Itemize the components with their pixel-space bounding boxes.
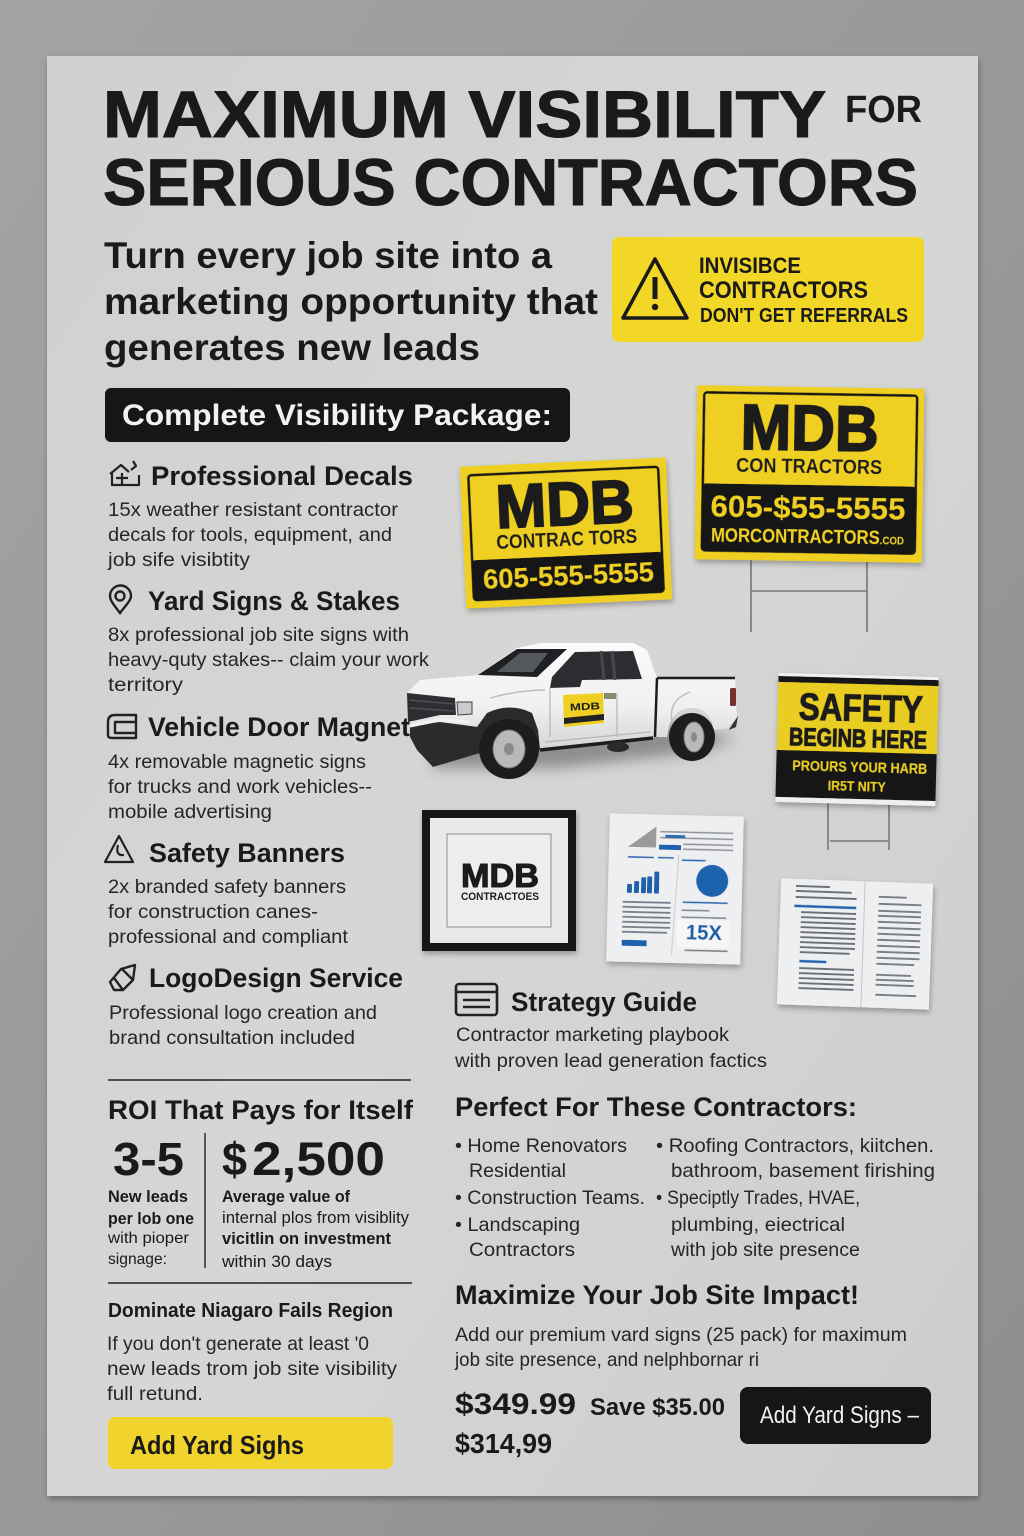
framed logo xyxy=(422,810,576,951)
subtitle: Turn every job site into a xyxy=(104,235,552,276)
guarantee: If you don't generate at least '0 xyxy=(107,1333,369,1355)
stat: leads: 3-5 xyxy=(113,1133,184,1185)
subtitle xyxy=(104,235,598,368)
safety sign: BEGINB HERE xyxy=(789,723,927,755)
framed logo: MDB xyxy=(461,857,539,894)
stat: leads: New leads xyxy=(108,1188,188,1206)
sign: MDB contractors large xyxy=(695,385,924,632)
maximize impact offer: job site presence, and nelphbornar ri xyxy=(454,1349,759,1371)
icon: logo tag xyxy=(110,965,135,990)
item: yard signs and stakes: heavy-quty stakes-- claim your work xyxy=(108,649,429,671)
subtitle: marketing opportunity that xyxy=(104,281,598,322)
list right: • Roofing Contractors, kiitchen. xyxy=(656,1135,934,1157)
item: professional decals: job sife visibtity xyxy=(107,549,250,571)
guarantee: full retund. xyxy=(107,1383,203,1405)
strategy guide xyxy=(454,984,767,1072)
maximize impact offer xyxy=(454,1280,907,1371)
item: vehicle door magnets: Vehicle Door Magnet xyxy=(148,712,410,742)
sign: MDB contractors small xyxy=(460,457,672,609)
strategy guide: Strategy Guide xyxy=(511,987,697,1017)
icon: magnet sign xyxy=(108,715,136,738)
item: logo design service: brand consultation included xyxy=(109,1027,355,1049)
stat: leads: with pioper xyxy=(107,1230,190,1247)
list right: plumbing, eiectrical xyxy=(671,1214,845,1236)
warning callout: DON'T GET REFERRALS xyxy=(700,305,908,327)
stat: value: $ xyxy=(222,1133,247,1185)
stat: leads: signage: xyxy=(108,1251,167,1268)
sign: MDB contractors large: MORCONTRACTORS.COD xyxy=(711,525,904,549)
item: yard signs and stakes: Yard Signs & Stakes xyxy=(148,586,400,616)
item: yard signs and stakes xyxy=(108,586,429,696)
package heading bar xyxy=(105,388,570,442)
title: SERIOUS CONTRACTORS xyxy=(103,145,918,219)
safety sign xyxy=(775,673,939,850)
item: vehicle door magnets: 4x removable magnetic signs xyxy=(108,751,366,773)
item: safety banners: professional and compliant xyxy=(108,926,349,948)
title: FOR xyxy=(845,89,922,131)
icon: decals xyxy=(110,461,139,485)
list left: • Home Renovators xyxy=(455,1135,627,1157)
list left xyxy=(455,1135,645,1261)
safety sign: IR5T NITY xyxy=(828,777,887,795)
ROI section: ROI That Pays for Itself xyxy=(108,1095,414,1125)
warning callout: CONTRACTORS xyxy=(699,277,868,304)
item: safety banners: Safety Banners xyxy=(149,838,345,868)
guarantee: new leads trom job site visibility xyxy=(107,1358,397,1380)
perfect for these contractors xyxy=(455,1092,935,1261)
maximize impact offer: Maximize Your Job Site Impact! xyxy=(455,1280,859,1310)
yellow button: Add Yard Sighs xyxy=(130,1430,304,1460)
item: professional decals: Professional Decals xyxy=(151,461,413,491)
framed logo: CONTRACTOES xyxy=(461,891,539,903)
sign: MDB contractors large: MDB xyxy=(740,391,879,465)
list right: with job site presence xyxy=(670,1239,860,1261)
stat: leads: per lob one xyxy=(108,1210,194,1228)
item: professional decals: 15x weather resistant contractor xyxy=(108,499,399,521)
maximize impact offer: Add our premium vard signs (25 pack) for maximum xyxy=(455,1324,907,1346)
sign: MDB contractors large: CON TRACTORS xyxy=(736,455,882,479)
pricing: Save $35.00 xyxy=(590,1394,725,1421)
item: safety banners xyxy=(105,836,349,948)
item: vehicle door magnets xyxy=(108,712,410,823)
warning callout xyxy=(612,237,924,342)
stat: leads xyxy=(107,1133,194,1268)
stat: value: within 30 days xyxy=(221,1252,332,1271)
subtitle: generates new leads xyxy=(104,327,480,368)
black button: Add Yard Signs – xyxy=(760,1402,920,1429)
item: yard signs and stakes: 8x professional job site signs with xyxy=(108,624,409,646)
item: logo design service: Professional logo creation and xyxy=(109,1002,377,1024)
item: professional decals xyxy=(107,461,413,571)
warning callout: INVISIBCE xyxy=(699,253,801,278)
item: logo design service: LogoDesign Service xyxy=(149,963,403,993)
item: safety banners: 2x branded safety banners xyxy=(108,876,346,898)
icon: warning triangle xyxy=(623,259,687,318)
item: professional decals: decals for tools, equipment, and xyxy=(108,524,392,546)
white pickup truck: MDB xyxy=(570,701,600,714)
sign: MDB contractors large: 605-$55-5555 xyxy=(710,488,906,527)
list left: • Construction Teams. xyxy=(455,1187,645,1209)
white pickup truck xyxy=(407,643,738,779)
list left: Residential xyxy=(469,1160,566,1182)
item: safety banners: for construction canes- xyxy=(108,901,318,923)
icon: safety triangle xyxy=(105,836,133,862)
strategy guide: Contractor marketing playbook xyxy=(456,1024,729,1046)
icon: map pin xyxy=(110,586,131,613)
pie chart xyxy=(696,865,729,897)
icon: notebook xyxy=(456,984,497,1015)
yellow button xyxy=(108,1417,393,1469)
perfect for these contractors: Perfect For These Contractors: xyxy=(455,1092,857,1122)
strategy document with chart: 15X xyxy=(686,921,722,945)
pricing xyxy=(455,1388,725,1459)
ROI section xyxy=(107,1080,414,1283)
sign: MDB contractors small: 605-555-5555 xyxy=(482,556,655,595)
list left: Contractors xyxy=(469,1239,575,1261)
list left: • Landscaping xyxy=(455,1214,580,1236)
pricing: $349.99 xyxy=(455,1388,576,1421)
safety sign: PROURS YOUR HARB xyxy=(792,757,928,778)
item: logo design service xyxy=(109,963,403,1049)
bar chart xyxy=(627,871,659,894)
strategy guide: with proven lead generation factics xyxy=(454,1050,767,1072)
package heading bar: Complete Visibility Package: xyxy=(122,399,552,432)
item: vehicle door magnets: for trucks and work vehicles-- xyxy=(108,776,372,798)
item: vehicle door magnets: mobile advertising xyxy=(108,801,272,823)
black button xyxy=(740,1387,931,1444)
stat: value: internal plos from visiblity xyxy=(222,1208,409,1227)
guarantee: Dominate Niagaro Fails Region xyxy=(108,1300,393,1322)
pricing: $314,99 xyxy=(455,1428,552,1459)
strategy document with chart xyxy=(606,813,744,965)
stat: value xyxy=(221,1132,409,1271)
stat: value: Average value of xyxy=(222,1188,350,1206)
safety sign: SAFETY xyxy=(798,686,923,732)
stat: value: 2,500 xyxy=(252,1132,385,1185)
stat: value: vicitlin on investment xyxy=(222,1230,392,1248)
list right: • Speciptly Trades, HVAE, xyxy=(656,1187,860,1209)
sign: MDB contractors small: MDB xyxy=(494,467,635,541)
guarantee xyxy=(107,1300,397,1405)
title xyxy=(103,77,922,219)
list right xyxy=(656,1135,935,1261)
title: MAXIMUM VISIBILITY xyxy=(103,77,826,151)
open playbook pages xyxy=(777,878,933,1010)
item: yard signs and stakes: territory xyxy=(108,674,183,696)
sign: MDB contractors small: CONTRAC TORS xyxy=(496,526,638,554)
list right: bathroom, basement firishing xyxy=(671,1160,935,1182)
